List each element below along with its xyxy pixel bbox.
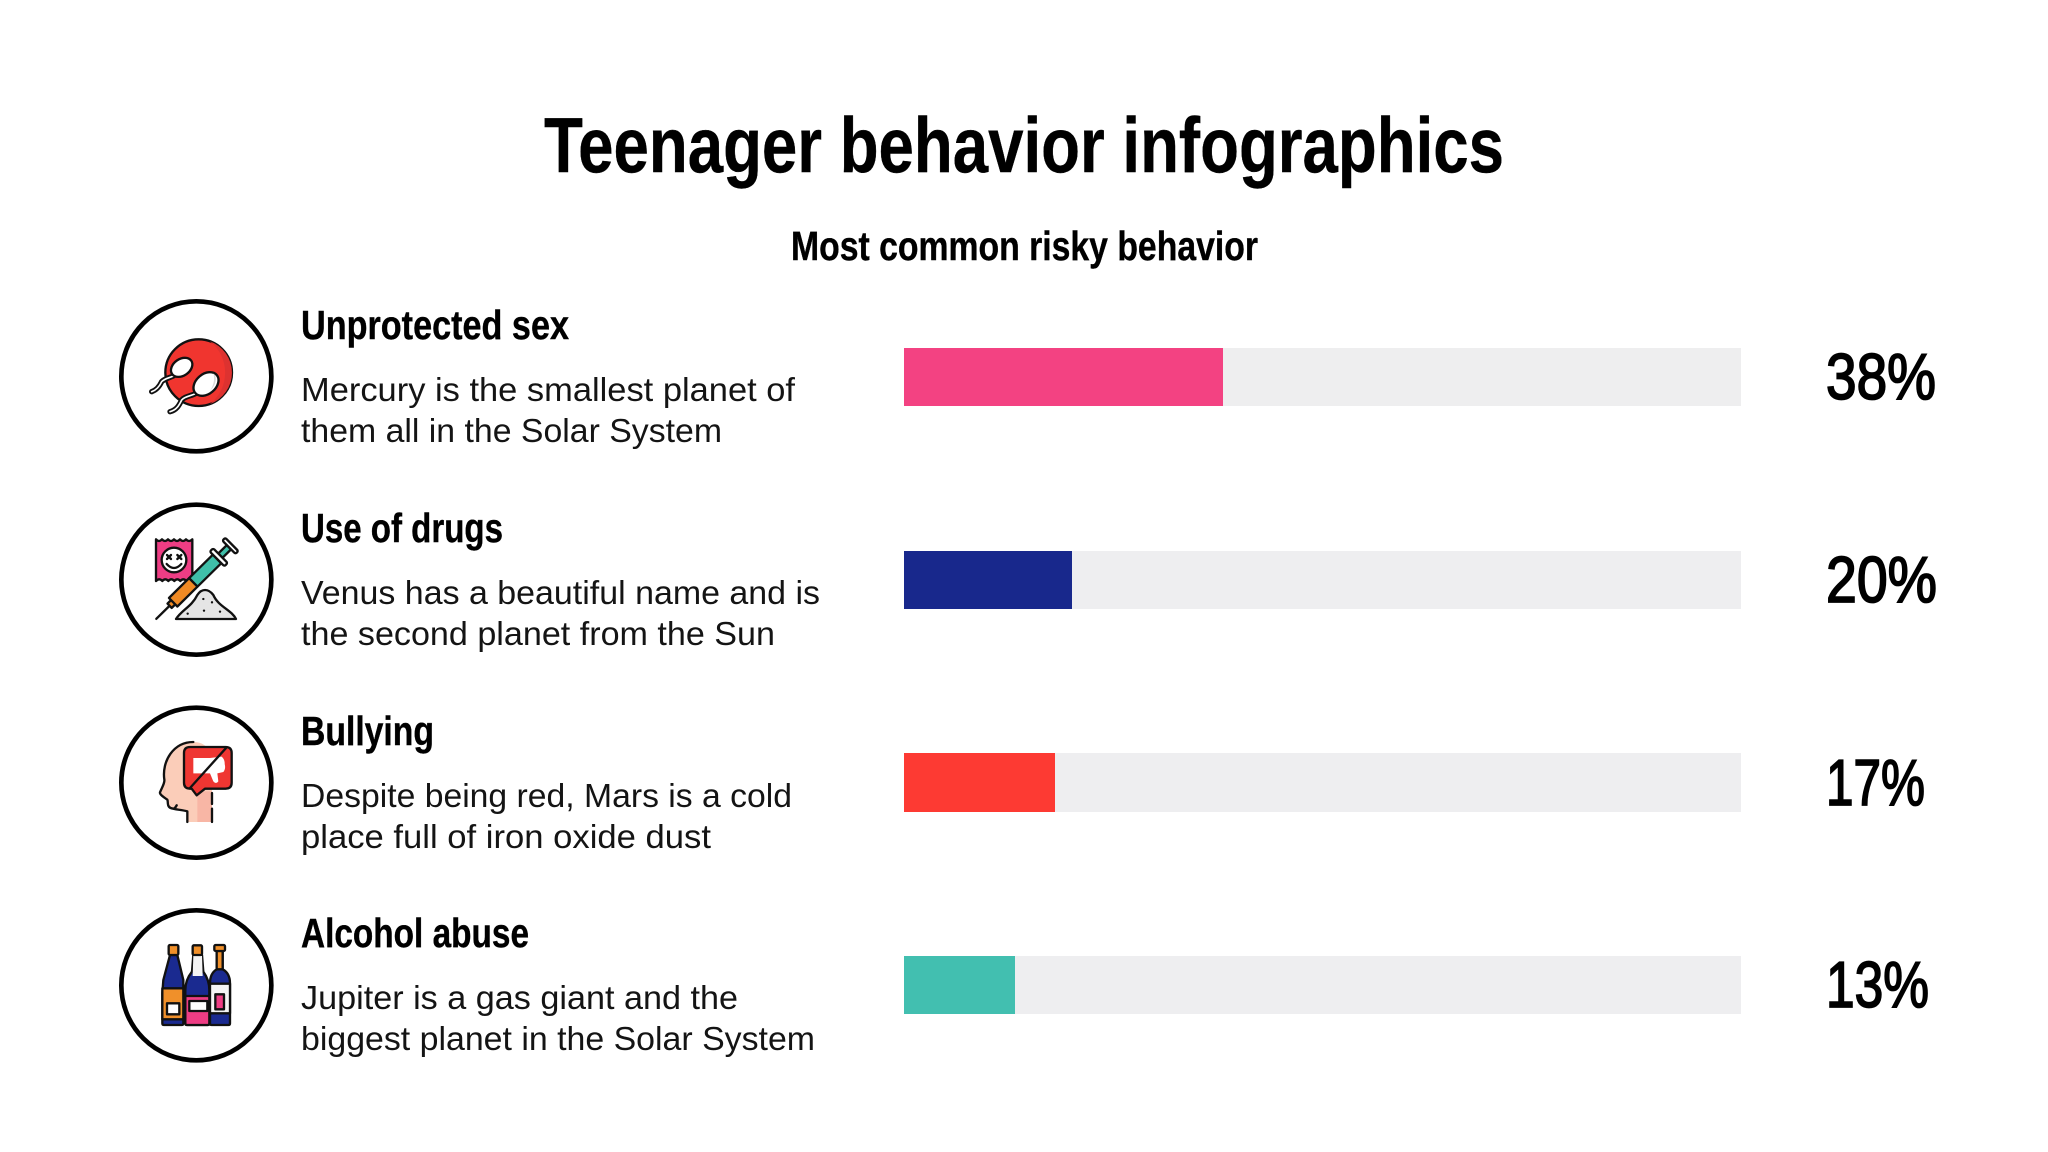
title: Teenager behavior infographics bbox=[544, 101, 1504, 189]
row: unprotected sex bbox=[121, 301, 1936, 451]
heading: alcohol abuse: Alcohol abuse bbox=[301, 910, 529, 956]
row: use of drugs bbox=[121, 505, 1937, 655]
bar chart: 38 percent bbox=[904, 348, 1741, 406]
heading: use of drugs: Use of drugs bbox=[301, 505, 503, 551]
description: venus bbox=[301, 575, 820, 653]
bar chart: 13 percent bbox=[904, 956, 1741, 1014]
value: 20 percent: 20% bbox=[1826, 543, 1937, 616]
bar chart: 20 percent bbox=[904, 551, 1741, 609]
description: mars: Despite being red, Mars is a cold bbox=[301, 778, 792, 815]
heading: bullying: Bullying bbox=[301, 708, 434, 754]
heading: unprotected sex: Unprotected sex bbox=[301, 302, 569, 348]
description: mars: place full of iron oxide dust bbox=[301, 819, 712, 856]
bar chart: 17 percent bbox=[904, 753, 1741, 812]
value: 17 percent: 17% bbox=[1826, 746, 1925, 819]
description: mercury bbox=[301, 372, 796, 450]
icon: three bottles bbox=[121, 910, 271, 1060]
description: venus: Venus has a beautiful name and is bbox=[301, 575, 820, 612]
value: 38 percent: 38% bbox=[1826, 340, 1936, 413]
subtitle: Most common risky behavior bbox=[791, 223, 1258, 269]
icon: sperm and egg bbox=[121, 301, 271, 451]
icon: syringe and powder bbox=[121, 505, 271, 655]
description: mars bbox=[301, 778, 792, 856]
description: jupiter: Jupiter is a gas giant and the bbox=[301, 980, 738, 1017]
description: venus: the second planet from the Sun bbox=[301, 616, 775, 653]
description: jupiter: biggest planet in the Solar System bbox=[301, 1021, 815, 1058]
description: mercury: them all in the Solar System bbox=[301, 413, 722, 450]
icon: head with thumbs down bubble bbox=[121, 708, 271, 858]
description: mercury: Mercury is the smallest planet of bbox=[301, 372, 796, 409]
row: alcohol abuse bbox=[121, 910, 1929, 1060]
description: jupiter bbox=[301, 980, 815, 1058]
row: bullying bbox=[121, 708, 1925, 858]
value: 13 percent: 13% bbox=[1826, 948, 1929, 1021]
